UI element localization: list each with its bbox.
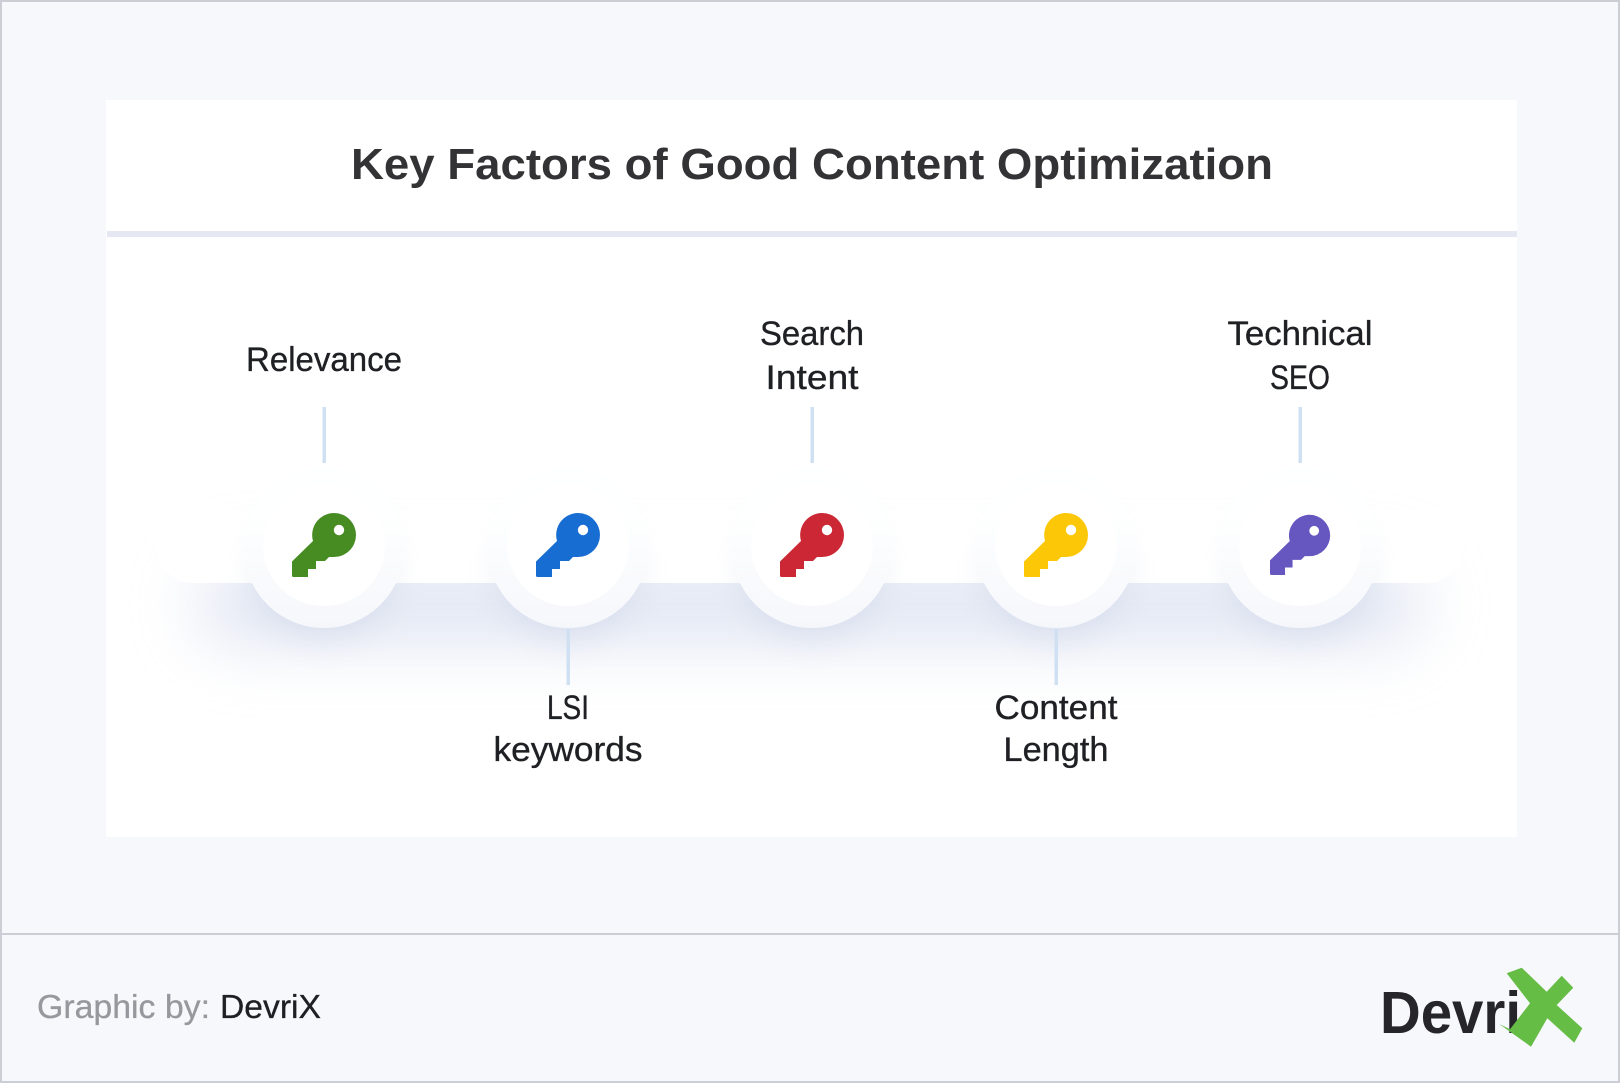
icon: green key xyxy=(292,513,356,577)
label: Technical SEO: SEO xyxy=(1270,359,1330,397)
divider under title xyxy=(107,231,1517,237)
label: Search Intent: Intent xyxy=(766,359,859,397)
footer divider xyxy=(0,933,1620,935)
timeline bar xyxy=(157,510,1463,583)
label: Search Intent: Search xyxy=(760,315,864,353)
label: LSI keywords xyxy=(494,689,642,769)
icon: yellow key xyxy=(1024,513,1088,577)
logo: DevriX xyxy=(1380,968,1582,1047)
footer credit xyxy=(37,988,321,1025)
connector: Technical SEO xyxy=(1298,407,1302,463)
label: Content Length: Content xyxy=(994,689,1118,727)
label: LSI keywords: LSI xyxy=(547,689,589,727)
logo: DevriX: Devri xyxy=(1380,980,1521,1046)
label: Search Intent xyxy=(760,315,864,397)
icon: red key xyxy=(780,513,844,577)
outer circles row xyxy=(252,583,1372,640)
label: LSI keywords: keywords xyxy=(494,731,642,769)
label: Relevance: Relevance xyxy=(246,341,402,379)
timeline shadow xyxy=(196,562,1424,646)
label: Content Length xyxy=(994,689,1118,769)
label: Content Length: Length xyxy=(1004,731,1108,769)
footer credit: Graphic by: xyxy=(37,988,210,1025)
connector: Relevance xyxy=(322,407,326,463)
label: Technical SEO xyxy=(1228,315,1372,397)
connector: Search Intent xyxy=(810,407,814,463)
icon: blue key xyxy=(536,513,600,577)
title: Key Factors of Good Content Optimization xyxy=(351,140,1273,189)
panel: main white card xyxy=(106,100,1517,837)
connector: LSI keywords xyxy=(566,629,570,685)
icon: purple key xyxy=(1270,515,1330,575)
footer credit: DevriX xyxy=(220,988,321,1025)
connector: Content Length xyxy=(1054,629,1058,685)
label: Technical SEO: Technical xyxy=(1228,315,1372,353)
